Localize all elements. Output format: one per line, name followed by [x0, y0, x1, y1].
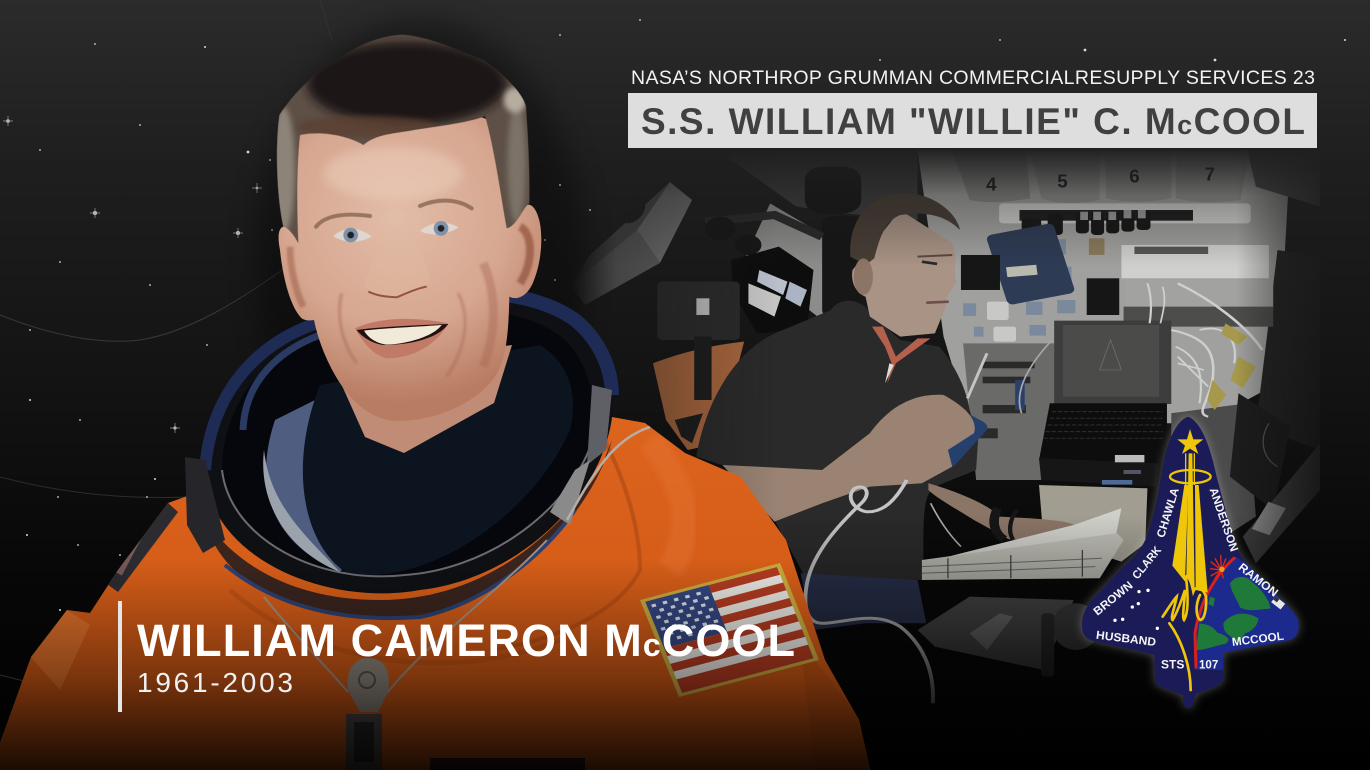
numbered stowage pockets: 4 — [986, 174, 997, 195]
astronaut name: WILLIAM CAMERON McCOOL — [137, 615, 795, 666]
switch panel — [963, 343, 1059, 480]
stack of papers — [922, 508, 1124, 580]
name caption — [118, 601, 795, 712]
stowage box at left — [570, 182, 692, 305]
man's shirt — [696, 301, 978, 580]
astronaut portrait: William McCool — [0, 20, 880, 770]
crew names: 107 — [1199, 658, 1218, 671]
STS-107 mission patch — [1082, 417, 1303, 708]
numbered stowage pockets: 5 — [1057, 170, 1068, 191]
lower panel with blue squares — [961, 223, 1273, 342]
crew names: RAMON — [1236, 561, 1280, 600]
orange garment behind man — [653, 337, 744, 450]
life dates: 1961-2003 — [137, 667, 293, 698]
crew names — [1091, 486, 1285, 671]
yellow tags — [1207, 323, 1256, 410]
laptop — [1039, 321, 1171, 487]
smile — [355, 319, 448, 358]
US flag shoulder patch — [640, 563, 819, 697]
numbered stowage pockets: 7 — [1205, 164, 1215, 185]
soft shadow behind astronaut — [255, 20, 585, 500]
numbered stowage pockets — [960, 168, 1243, 203]
constellation stars — [1113, 589, 1159, 630]
eyes — [333, 221, 458, 242]
trousers — [800, 573, 926, 630]
cabin wall — [722, 150, 1320, 450]
crew names: ANDERSON — [1206, 486, 1240, 553]
crew names: BROWN — [1091, 579, 1135, 618]
floor plate and round gear — [918, 597, 1100, 677]
tangled wires — [1147, 283, 1262, 417]
eyebrows — [316, 201, 472, 227]
cheek shading — [290, 227, 530, 377]
suit cables and zipper fitting — [264, 427, 650, 770]
crew names: CHAWLA — [1154, 486, 1182, 539]
area under wires — [1171, 403, 1256, 550]
ship name banner: S.S. WILLIAM "WILLIE" C. McCOOL — [641, 101, 1305, 142]
forehead highlight — [323, 147, 463, 200]
head and face — [272, 35, 541, 421]
skin — [279, 90, 541, 421]
neck — [335, 345, 512, 453]
shuttle silhouette — [1082, 417, 1299, 708]
crew names: STS — [1161, 658, 1185, 671]
white coiled cord — [805, 340, 1052, 703]
yellow contrails and halo — [1170, 429, 1211, 593]
crew names: MCCOOL — [1231, 630, 1285, 649]
dark fade over lower suit — [0, 560, 880, 770]
right dark keyboard — [1230, 393, 1320, 563]
caption rule — [118, 601, 122, 712]
patch white glow — [1082, 417, 1299, 708]
inner liner and dark turtleneck — [263, 345, 573, 575]
mission subtitle: NASA’S NORTHROP GRUMMAN COMMERCIALRESUPPLY SERVICES 23 — [631, 67, 1315, 89]
earth and atmosphere — [1195, 557, 1303, 670]
crew names: CLARK — [1130, 543, 1164, 582]
numbered stowage pockets: 6 — [1129, 166, 1140, 187]
crew names: HUSBAND — [1095, 629, 1157, 649]
nose — [365, 243, 430, 297]
orange launch suit — [0, 417, 870, 770]
red sunburst — [1210, 555, 1226, 578]
small Israeli flag mark — [1271, 596, 1285, 610]
neck ring lower collar — [205, 440, 612, 619]
man's forearm and hand with blue device — [722, 395, 1074, 539]
cream cloth — [1039, 485, 1147, 562]
background photo: astronaut working at shuttle flight deck — [570, 150, 1320, 703]
hair — [272, 35, 529, 243]
camera equipment cluster — [657, 167, 861, 340]
collar blue seam — [225, 510, 575, 618]
man's head — [850, 193, 960, 337]
MG signature — [1163, 576, 1206, 690]
white shelf and bottles — [999, 203, 1251, 235]
helmet neck ring — [185, 292, 613, 593]
